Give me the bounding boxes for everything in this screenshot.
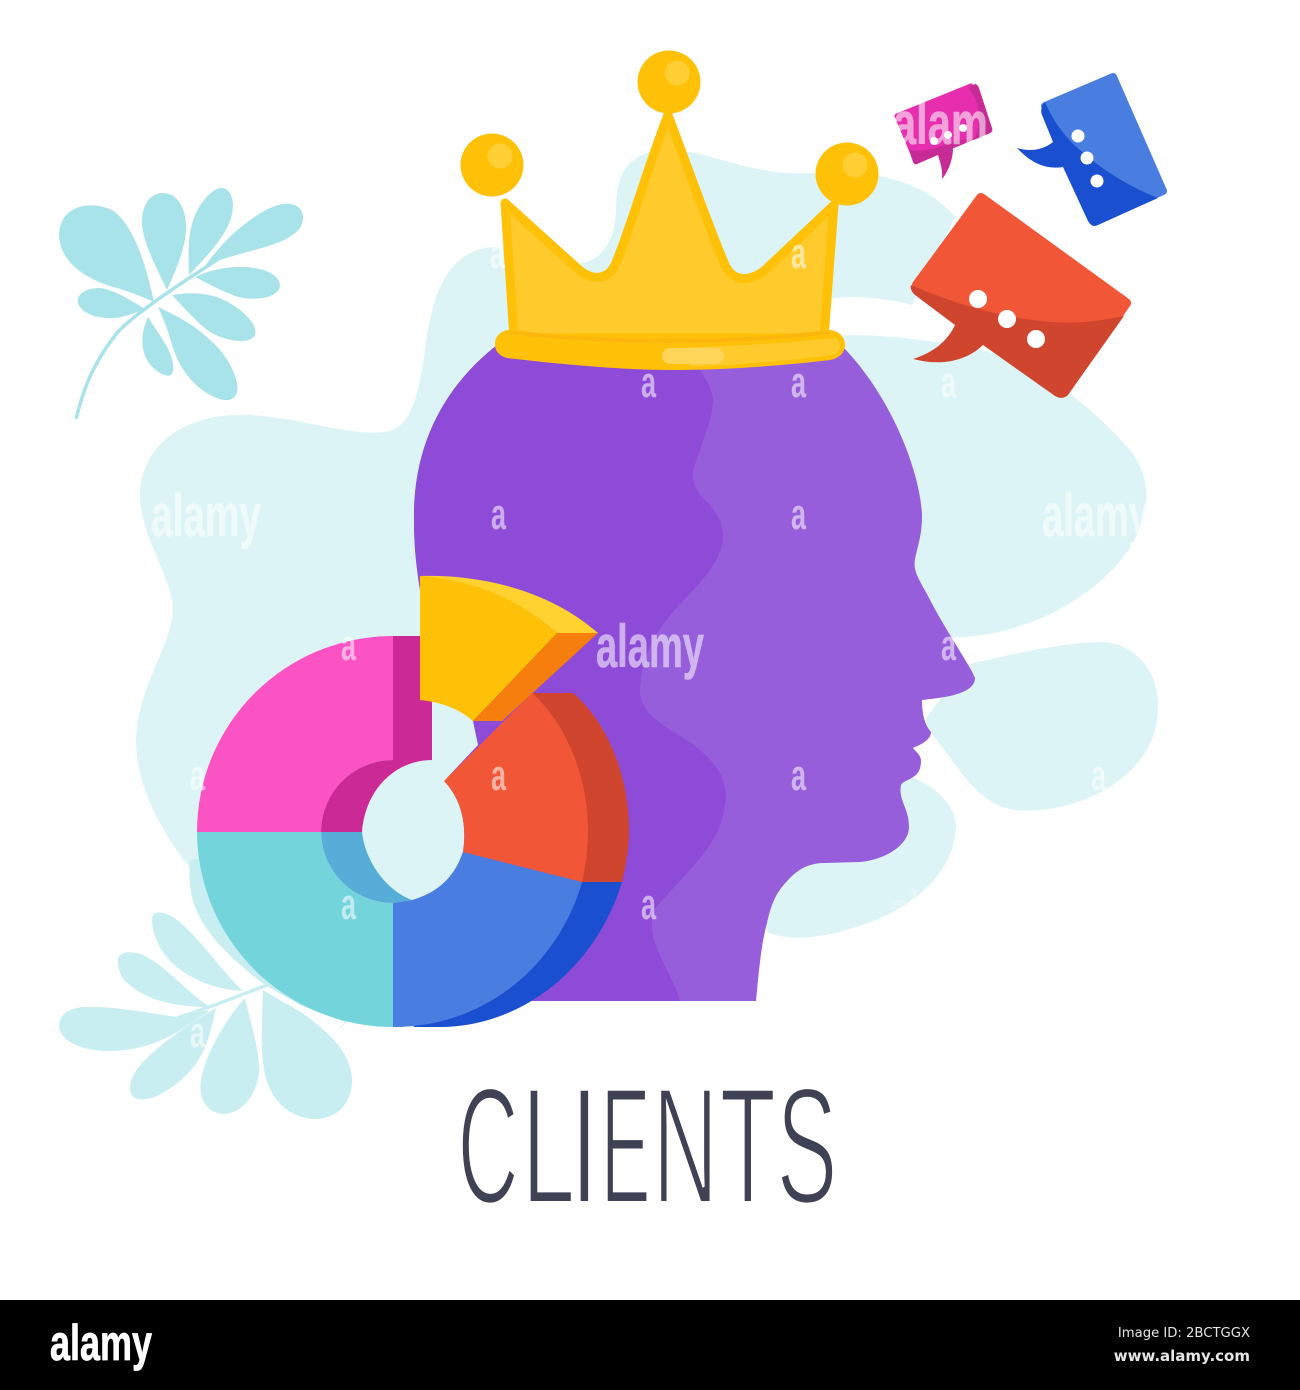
watermark: alamy lower right: alamy bbox=[888, 878, 996, 945]
bubble: red bbox=[911, 198, 1126, 398]
title bbox=[458, 1052, 837, 1239]
watermark: alamy on pink bubble: alamy bbox=[893, 90, 1011, 157]
chart segment: blue bbox=[393, 852, 622, 1027]
background blobs bbox=[136, 150, 1158, 1000]
watermark: repeated letters: a bbox=[190, 751, 205, 800]
donut hole showing background bbox=[362, 702, 478, 900]
watermark: alamy left: alamy bbox=[151, 482, 261, 549]
head silhouette bbox=[414, 345, 975, 1001]
chart segment: teal bbox=[197, 832, 412, 1027]
watermark: repeated letters: a bbox=[490, 229, 505, 278]
bubble: blue bbox=[1017, 77, 1163, 226]
chart segment: yellow pulled out bbox=[420, 576, 598, 721]
watermark: alamy right: alamy bbox=[1042, 482, 1150, 549]
title: I bbox=[569, 1052, 599, 1239]
leaf crescent behind donut bbox=[189, 850, 420, 1030]
watermark: alamy centre: alamy bbox=[596, 613, 704, 680]
watermark: repeated letters: a bbox=[791, 229, 806, 278]
watermark: repeated letters: a bbox=[190, 1008, 205, 1057]
watermarks bbox=[151, 90, 1150, 1057]
watermark: repeated letters: a bbox=[1091, 751, 1106, 800]
title: T bbox=[720, 1053, 776, 1239]
footer url: www.alamy.com bbox=[1114, 1347, 1250, 1365]
head: darker back half bbox=[414, 345, 726, 1001]
watermark: repeated letters: a bbox=[791, 751, 806, 800]
speech bubbles bbox=[897, 77, 1163, 398]
watermark: repeated letters: a bbox=[341, 880, 356, 929]
donut chart bbox=[197, 576, 629, 1027]
head: profile bbox=[414, 345, 975, 1001]
watermark: repeated letters: a bbox=[341, 621, 356, 670]
watermark: repeated letters: a bbox=[941, 621, 956, 670]
crown: band bbox=[495, 330, 845, 370]
watermark: repeated letters: a bbox=[491, 751, 506, 800]
footer bar bbox=[0, 1300, 1300, 1390]
bubble: pink bbox=[897, 84, 992, 179]
icon: lower-left leaf sprig bbox=[59, 850, 420, 1119]
crown: left ball bbox=[460, 134, 524, 196]
footer logo: alamy bbox=[50, 1315, 152, 1371]
title: N bbox=[653, 1054, 718, 1239]
watermark: repeated letters: a bbox=[641, 358, 656, 407]
title: S bbox=[776, 1054, 837, 1239]
title: C bbox=[458, 1053, 519, 1238]
crown bbox=[460, 50, 878, 370]
footer image id: Image ID: 2BCTGGX bbox=[1118, 1326, 1250, 1341]
title: E bbox=[601, 1053, 651, 1239]
watermark: repeated letters: a bbox=[641, 880, 656, 929]
watermark: repeated letters bbox=[190, 97, 1106, 1057]
watermark: repeated letters: a bbox=[791, 490, 806, 539]
crown: body bbox=[505, 115, 834, 338]
watermark: repeated letters: a bbox=[941, 358, 956, 407]
title: L bbox=[522, 1053, 575, 1238]
watermark: repeated letters: a bbox=[491, 490, 506, 539]
crown: right ball bbox=[816, 142, 878, 206]
crown: centre ball bbox=[638, 50, 700, 114]
watermark: repeated letters: a bbox=[641, 97, 656, 146]
watermark: repeated letters: a bbox=[791, 358, 806, 407]
icon: upper-left leaf sprig bbox=[59, 188, 303, 419]
chart segment: red bbox=[444, 693, 629, 882]
chart segment: pink bbox=[197, 636, 432, 832]
